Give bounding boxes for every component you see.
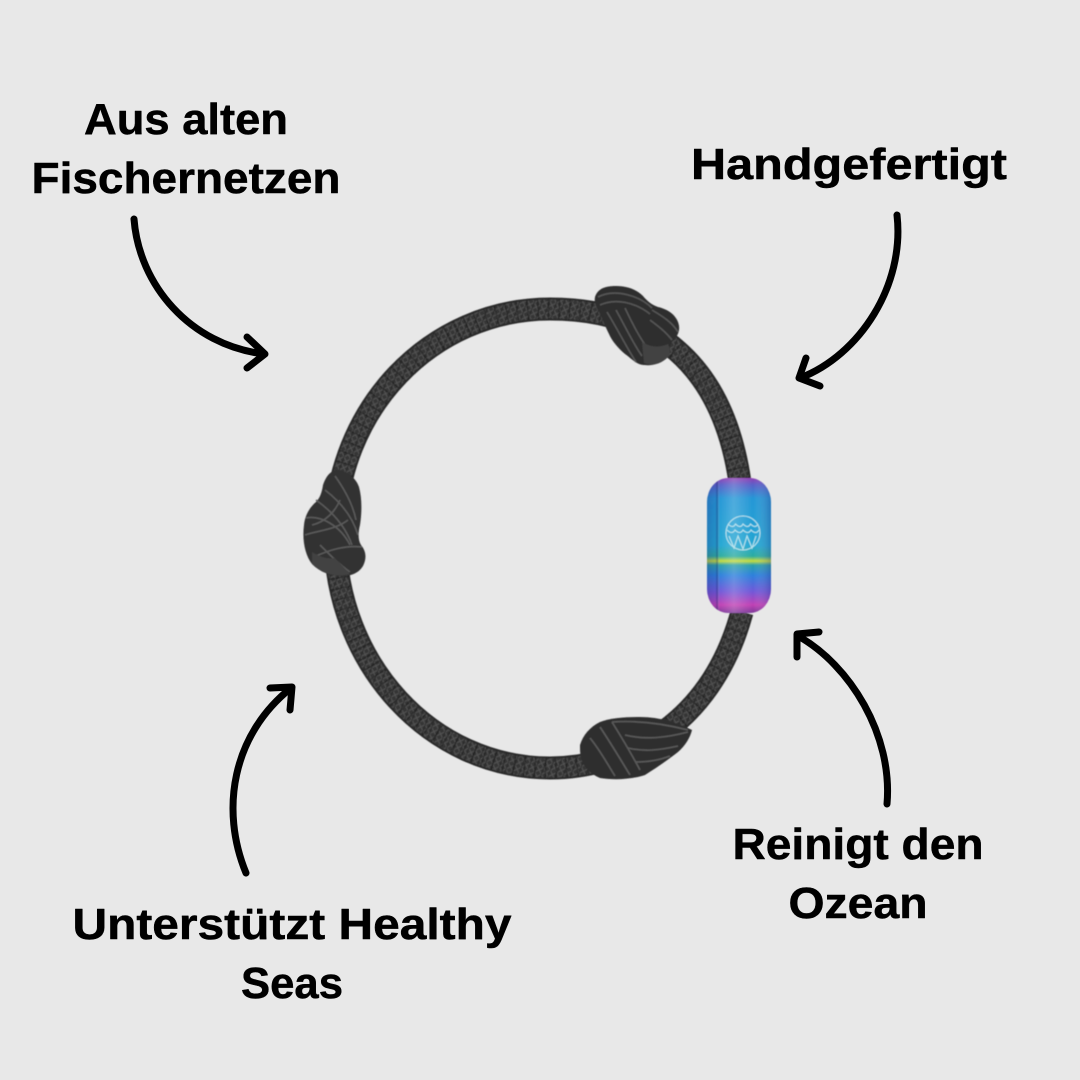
rope (335, 309, 742, 768)
heading: Reinigt den Ozean: Reinigt den (732, 820, 984, 869)
bracelet (303, 286, 771, 779)
arrow: top left (134, 219, 265, 368)
heading: Aus alten Fischernetzen (32, 95, 340, 203)
heading: Reinigt den Ozean: Ozean (788, 879, 928, 928)
metal clasp (707, 478, 771, 613)
clasp wave logo (726, 516, 760, 550)
knot: top (595, 286, 679, 365)
heading: Handgefertigt: Handgefertigt (691, 140, 1007, 189)
arrow: bottom left (233, 687, 292, 873)
heading: Aus alten Fischernetzen: Fischernetzen (32, 154, 340, 203)
arrow: top right (799, 215, 898, 386)
knot: bottom (580, 717, 692, 779)
heading: Unterstützt Healthy Seas: Seas (241, 959, 343, 1008)
heading: Aus alten Fischernetzen: Aus alten (84, 95, 288, 144)
knot: left (303, 470, 365, 576)
heading: Unterstützt Healthy Seas (72, 900, 512, 1008)
heading: Unterstützt Healthy Seas: Unterstützt Healthy (72, 900, 512, 949)
arrow: bottom right (797, 632, 888, 804)
heading: Reinigt den Ozean (732, 820, 984, 928)
